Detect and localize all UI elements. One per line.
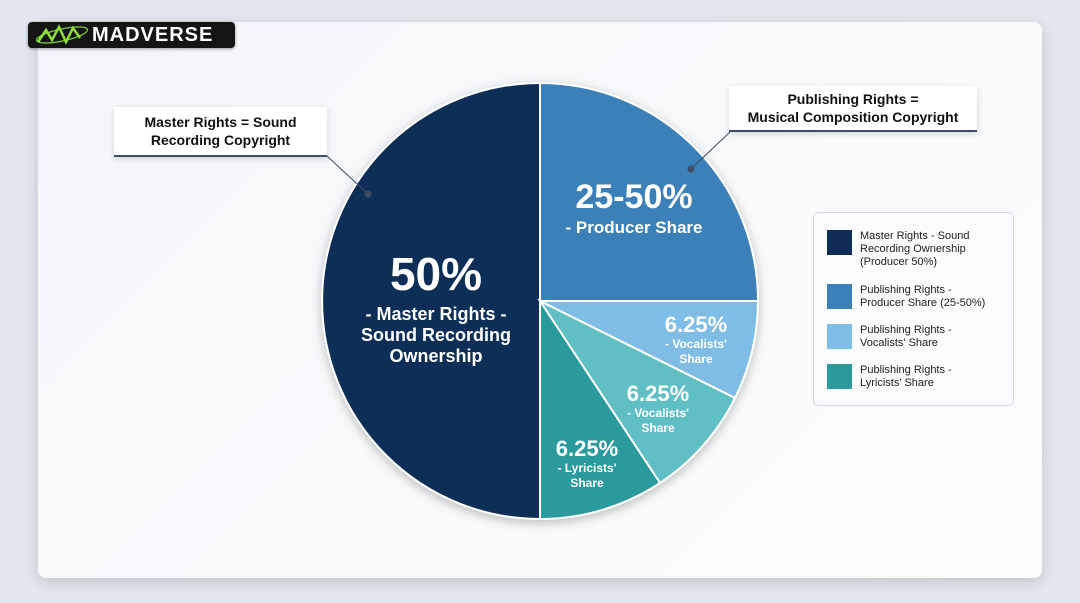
slice labels: - Vocalists' — [665, 337, 727, 351]
slice: producer share — [540, 83, 758, 301]
legend: Master Rights - Sound — [860, 230, 969, 242]
slice: vocalists 1 — [540, 301, 758, 398]
slice: master rights — [322, 83, 540, 519]
legend: (Producer 50%) — [860, 256, 937, 268]
slice: lyricists — [540, 301, 660, 519]
leader lines — [327, 132, 730, 197]
logo — [28, 22, 235, 48]
slice labels — [361, 178, 727, 490]
slice labels: Sound Recording — [361, 325, 511, 345]
legend: Recording Ownership — [860, 243, 966, 255]
callout: publishing rights: Publishing Rights = — [787, 91, 919, 107]
legend: Producer Share (25-50%) — [860, 297, 985, 309]
slice labels: - Master Rights - — [365, 304, 507, 324]
legend: Lyricists' Share — [860, 377, 934, 389]
callout: master rights: Recording Copyright — [151, 132, 290, 148]
slice labels: Ownership — [389, 346, 483, 366]
callout: master rights — [114, 107, 327, 157]
legend — [813, 212, 1014, 406]
slice labels: Share — [641, 421, 675, 435]
legend: Publishing Rights - — [860, 364, 952, 376]
slice labels: - Vocalists' — [627, 406, 689, 420]
slice labels: - Producer Share — [566, 218, 702, 237]
legend: Vocalists' Share — [860, 337, 938, 349]
slice labels: 50% — [390, 248, 482, 300]
slice labels: - Lyricists' — [557, 461, 617, 475]
legend: Publishing Rights - — [860, 284, 952, 296]
slice labels: 6.25% — [665, 312, 727, 337]
slice labels: 25-50% — [575, 178, 693, 216]
slice labels: 6.25% — [556, 436, 618, 461]
callout: publishing rights: Musical Composition Copyright — [748, 109, 958, 125]
logo: MADVERSE — [92, 24, 213, 46]
callout: publishing rights — [729, 86, 977, 132]
legend: Publishing Rights - — [860, 324, 952, 336]
slice labels: Share — [570, 476, 604, 490]
slice labels: 6.25% — [627, 381, 689, 406]
slice: vocalists 2 — [540, 301, 735, 483]
callout: master rights: Master Rights = Sound — [144, 114, 297, 130]
slice labels: Share — [679, 352, 713, 366]
